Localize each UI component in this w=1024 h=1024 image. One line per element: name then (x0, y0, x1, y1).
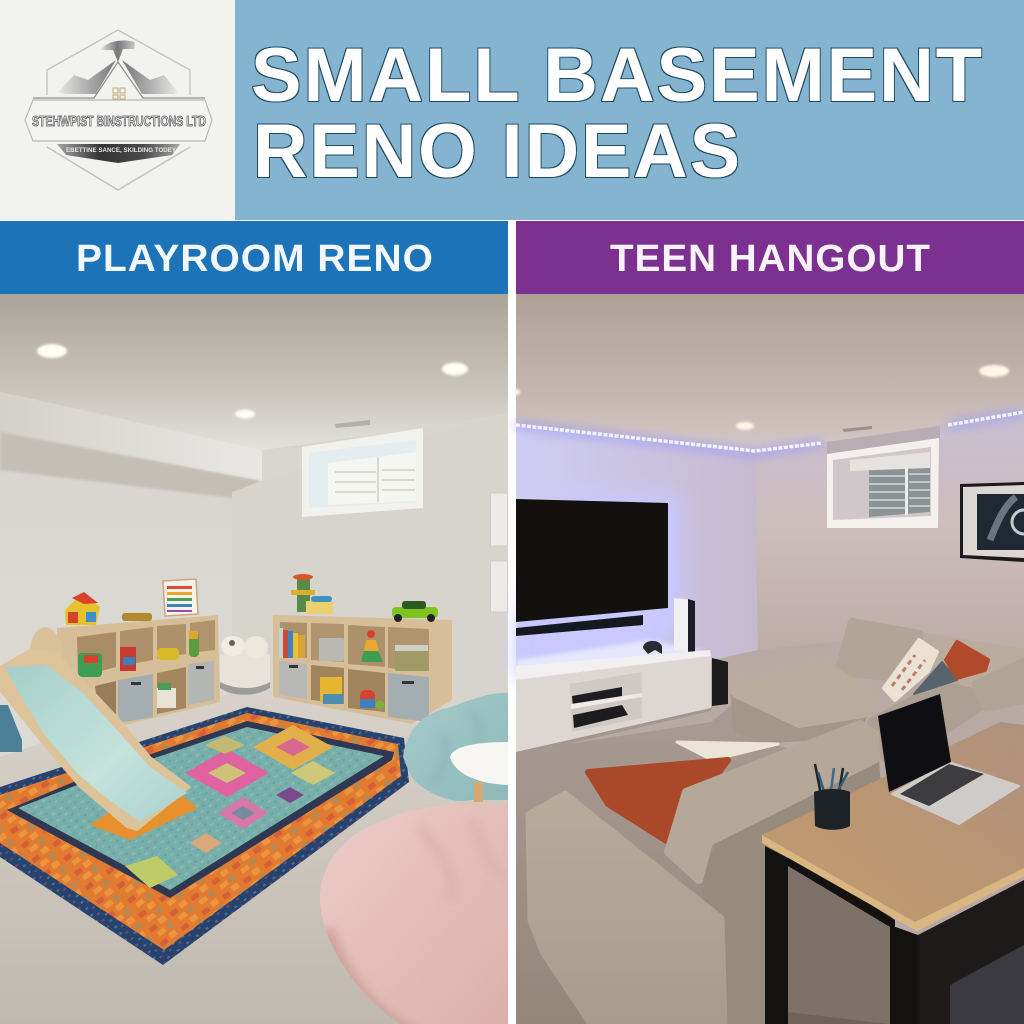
patterned pillow (884, 640, 937, 700)
logo: hammer head (100, 41, 135, 62)
sofa back cushion (668, 724, 876, 880)
logo: small window emblem (113, 88, 125, 99)
ceiling vent (842, 426, 872, 432)
wooden desk (762, 722, 1024, 931)
window (302, 428, 423, 517)
rust pillow (946, 642, 988, 678)
wall-mounted tv (516, 499, 668, 622)
title line 1: SMALL BASEMENT (251, 33, 984, 118)
slate pillow (914, 662, 957, 694)
slide wooden frame (0, 650, 190, 830)
rug (0, 707, 409, 965)
basket of plush toys (220, 636, 270, 695)
framed art (960, 482, 1024, 562)
floor (516, 705, 830, 1024)
header banner (235, 0, 1024, 220)
recessed ceiling lights (37, 344, 468, 418)
led strip (516, 412, 1024, 451)
cream pillow (677, 742, 778, 760)
floor under desk (788, 1012, 890, 1024)
toys on left shelf (65, 579, 199, 708)
corner walls (232, 413, 508, 720)
toy slide (0, 627, 190, 830)
section heading: teen hangout: TEEN HANGOUT (610, 238, 931, 280)
far sectional sofa (732, 622, 1024, 757)
toy car (392, 601, 438, 622)
window (827, 426, 940, 528)
logo: company name: STEHWPIST BINSTRUCTIONS LTD (32, 114, 206, 130)
game controller (643, 641, 662, 654)
sofa arm (528, 793, 725, 1024)
slide top arch (30, 627, 62, 658)
game console (674, 598, 695, 654)
pink bean bag (320, 803, 508, 1024)
under-tv light band (516, 640, 706, 672)
ceiling (516, 294, 1024, 453)
ceiling (0, 294, 508, 450)
play step stool (0, 705, 22, 752)
logo panel (0, 0, 235, 220)
left wall (516, 425, 758, 680)
logo: tagline: EBETTINE SANCE, SKILDING TODEY (66, 147, 177, 154)
low round table (450, 742, 508, 802)
desk legs and rail (765, 846, 918, 1024)
wall art frames (490, 493, 508, 612)
sofa back face under desk (788, 866, 895, 1024)
right wall (755, 412, 1024, 660)
panel: teen hangout scene (514, 294, 1024, 1024)
section heading: playroom: PLAYROOM RENO (76, 238, 434, 280)
tower toy (291, 574, 333, 614)
sofa body behind arm (700, 760, 900, 1024)
soundbar (516, 615, 643, 636)
toys on right shelf (279, 574, 438, 710)
logo: tagline ribbon (57, 144, 180, 163)
storage bins (118, 674, 153, 723)
slide surface (5, 665, 187, 822)
laptop (878, 694, 1019, 824)
abacus (163, 579, 198, 616)
ceiling vent (334, 420, 370, 428)
logo: hexagon badge outline (47, 30, 190, 190)
rug medallions (253, 725, 333, 770)
soffit beam (0, 392, 262, 498)
left cubby shelf (57, 579, 220, 726)
carpet floor (0, 690, 508, 1024)
logo: roof and houses (33, 60, 205, 98)
section heading: playroom (0, 221, 508, 294)
teal bean bag (403, 693, 508, 801)
storage bins (279, 661, 307, 699)
orange cushion (588, 760, 728, 842)
section heading: teen hangout (516, 221, 1024, 294)
title line 2: RENO IDEAS (253, 109, 742, 194)
tv backlight glow (516, 492, 682, 680)
logo: name plate (25, 100, 212, 141)
recessed ceiling lights (514, 365, 1009, 430)
pen cup (814, 764, 850, 830)
panel: playroom scene (0, 294, 508, 1024)
led strip glow (516, 412, 1024, 453)
media console (516, 650, 711, 756)
subwoofer (712, 658, 728, 706)
right cubby shelf (273, 574, 452, 724)
front sofa (528, 724, 900, 1024)
